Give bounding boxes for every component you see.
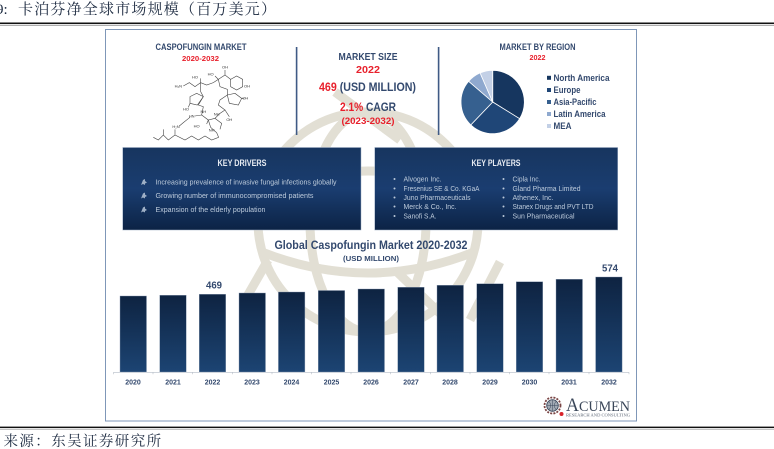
- year labels: 2031: [561, 380, 577, 386]
- icon: molecule structure: [153, 65, 250, 140]
- driver list: Expansion of the elderly population: [156, 205, 266, 214]
- year labels: 2022: [205, 380, 220, 386]
- players list: [394, 174, 594, 220]
- year labels: 2023: [244, 380, 260, 386]
- driver list: [156, 178, 337, 214]
- year labels: 2028: [442, 380, 458, 386]
- value labels: 574: [602, 264, 618, 274]
- players list: Stanex Drugs and PVT LTD: [512, 202, 594, 211]
- page title: 卡泊芬净全球市场规模（百万美元）: [18, 0, 277, 18]
- market size block: (2023-2032): [342, 116, 394, 127]
- market size block: 469 (USD MILLION): [319, 82, 416, 94]
- icon: molecule structure: OH: [244, 83, 250, 88]
- players list: Sanofi S.A.: [404, 212, 436, 220]
- year labels: 2029: [482, 380, 498, 386]
- pie legend: [547, 73, 610, 131]
- players list: Juno Pharmaceuticals: [404, 193, 471, 202]
- icon: molecule structure: NH: [214, 111, 220, 116]
- year labels: 2032: [601, 380, 617, 386]
- heading: Caspofungin market: CASPOFUNGIN MARKET: [156, 42, 247, 52]
- icon: molecule structure: HO: [183, 107, 189, 112]
- market size block: [319, 52, 416, 127]
- infographic frame: [106, 30, 636, 421]
- top rule: [0, 22, 774, 26]
- icon: molecule structure: H₂N: [172, 124, 180, 129]
- heading: key drivers: KEY DRIVERS: [218, 158, 266, 168]
- pie legend: Europe: [554, 85, 580, 95]
- icon: molecule structure: H₂N: [175, 83, 182, 88]
- players list: Athenex, Inc.: [512, 193, 554, 202]
- chart title: (USD MILLION): [343, 254, 400, 263]
- heading: market by region: 2022: [530, 55, 546, 62]
- year labels: 2024: [284, 380, 299, 386]
- heading: key players: KEY PLAYERS: [472, 158, 520, 168]
- icon: molecule structure: HO: [192, 75, 198, 80]
- chart title: Global Caspofungin Market 2020-2032: [274, 240, 468, 252]
- driver list: Increasing prevalence of invasive fungal infections globally: [156, 178, 337, 186]
- icon: molecule structure: OH: [242, 96, 248, 101]
- pie legend: Asia-Pacific: [554, 97, 596, 107]
- bar chart: [114, 264, 629, 386]
- icon: molecule structure: HN: [189, 113, 195, 118]
- driver bullets: [141, 179, 147, 212]
- icon: molecule structure: NH: [209, 127, 215, 132]
- players list: Gland Pharma Limited: [512, 184, 580, 193]
- pie legend: MEA: [554, 121, 572, 131]
- heading: market by region: [500, 42, 576, 62]
- panel: key players: [375, 148, 618, 230]
- icon: molecule structure: HO: [208, 71, 214, 76]
- logo: Acumen: [544, 395, 630, 418]
- pie chart: [461, 70, 524, 134]
- year labels: 2026: [363, 380, 379, 386]
- players list: Fresenius SE & Co. KGaA: [404, 184, 480, 193]
- heading: Caspofungin market: 2020-2032: [182, 54, 219, 63]
- market size block: 2022: [356, 65, 380, 76]
- logo: Acumen: ACUMEN: [566, 395, 630, 416]
- divider: [438, 47, 439, 135]
- pie legend: North America: [554, 73, 610, 83]
- icon: molecule structure: HO: [194, 123, 200, 128]
- divider: [296, 47, 297, 135]
- heading: market by region: MARKET BY REGION: [500, 42, 576, 52]
- icon: molecule structure: OH: [226, 117, 232, 122]
- players list: Sun Pharmaceutical: [512, 212, 575, 220]
- players list: Merck & Co., Inc.: [404, 202, 456, 211]
- market size block: 2.1% CAGR: [340, 102, 397, 114]
- watermark emblem: [245, 92, 500, 332]
- year labels: 2030: [522, 380, 537, 386]
- year labels: 2021: [165, 380, 181, 386]
- market size block: MARKET SIZE: [338, 52, 398, 63]
- value labels: [206, 264, 618, 292]
- heading: Caspofungin market: [156, 42, 247, 63]
- bottom rule: [0, 427, 774, 430]
- driver list: Growing number of immunocompromised patients: [156, 191, 314, 200]
- icon: molecule structure: OH: [222, 65, 228, 70]
- chart title: [274, 240, 468, 263]
- year labels: 2020: [125, 380, 141, 386]
- players list: Alvogen Inc.: [404, 174, 442, 184]
- players list: Cipla Inc.: [512, 174, 540, 184]
- year labels: 2025: [324, 380, 339, 386]
- logo: Acumen: RESEARCH AND CONSULTING: [566, 414, 630, 418]
- icon: molecule structure: NH: [200, 109, 206, 114]
- year labels: [125, 380, 617, 386]
- panel: key drivers: [123, 148, 361, 230]
- axis: [114, 372, 629, 374]
- year labels: 2027: [403, 380, 419, 386]
- pie legend: Latin America: [554, 109, 606, 119]
- value labels: 469: [206, 280, 222, 292]
